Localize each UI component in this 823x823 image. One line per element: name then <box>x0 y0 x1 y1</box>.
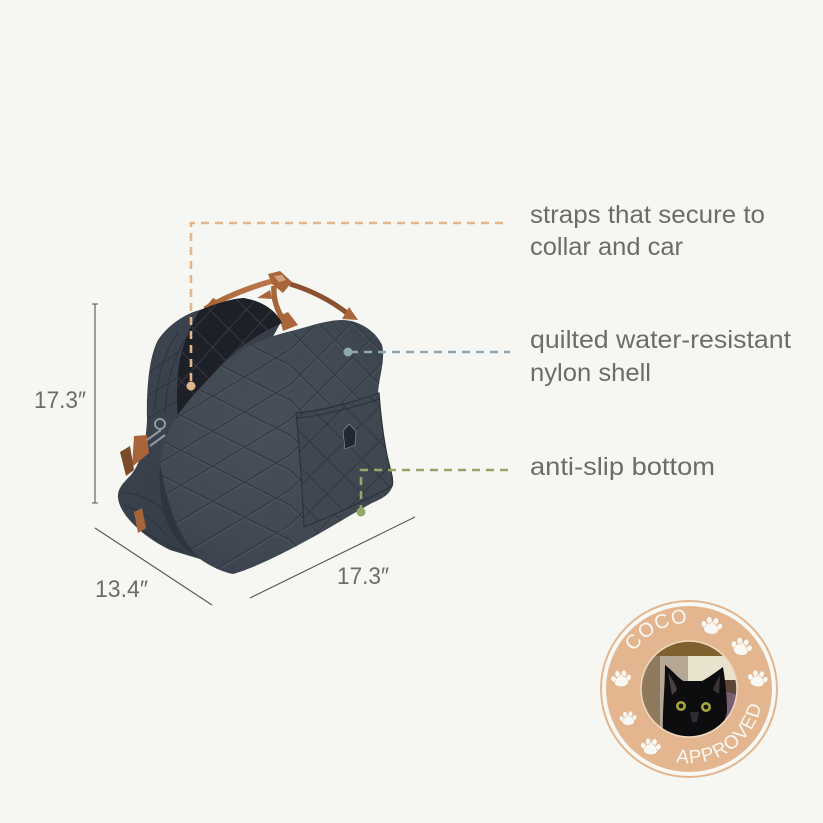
badge: Coco approved: APPROVED <box>676 704 760 764</box>
paw prints <box>611 616 769 755</box>
badge: Coco approved <box>600 600 778 778</box>
shadow fold <box>160 463 200 559</box>
infographic canvas <box>36 205 791 778</box>
callout: shell <box>344 326 791 387</box>
dimension: height: 17.3″ <box>34 387 86 414</box>
callout: shell: quilted water-resistant <box>530 326 791 354</box>
callout: shell: nylon shell <box>530 359 651 387</box>
side buckle <box>120 419 165 533</box>
callout: straps: straps that secure to <box>530 201 765 229</box>
back wall stitching <box>122 332 188 552</box>
badge text: COCO <box>626 610 686 648</box>
inner quilted lining <box>177 298 282 416</box>
back wall <box>118 298 281 559</box>
pocket <box>295 392 394 528</box>
callout: bottom <box>356 453 715 516</box>
badge photo: cat <box>640 640 738 738</box>
dimension: depth: 13.4″ <box>95 576 148 603</box>
dimension: height <box>34 304 98 503</box>
front panel <box>160 320 394 574</box>
handles <box>203 271 358 331</box>
dimension: depth <box>95 528 212 605</box>
callout: straps: collar and car <box>530 233 683 261</box>
dimension: width: 17.3″ <box>337 563 389 590</box>
callout: straps <box>186 201 765 390</box>
callout: bottom: anti-slip bottom <box>530 453 715 481</box>
pocket logo tag <box>343 424 356 449</box>
quilting <box>160 320 390 570</box>
product: quilted bag <box>118 271 394 574</box>
dimension: width <box>250 517 415 598</box>
